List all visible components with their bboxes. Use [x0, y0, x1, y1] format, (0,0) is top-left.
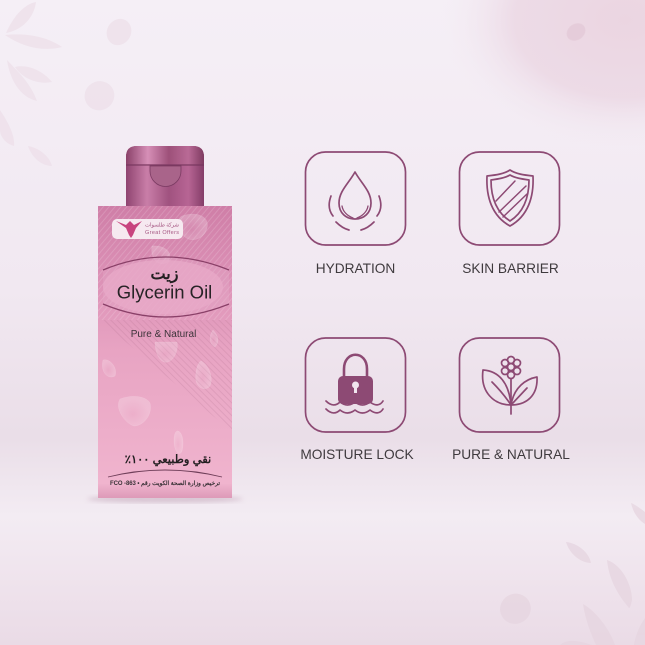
arabic product name: زيت: [151, 266, 179, 284]
icon: flower with leaves: [483, 356, 537, 414]
label: moisture lock: MOISTURE LOCK: [300, 447, 414, 462]
icon: water drop: [329, 172, 381, 230]
decorative petals bottom right: [495, 503, 645, 645]
icon card: skin barrier: [460, 152, 560, 245]
bottle cap: [126, 146, 204, 206]
label oval: [103, 257, 229, 317]
bottle shadow: [87, 495, 243, 503]
decorative petals top left: [0, 2, 589, 166]
icon: shield: [487, 170, 533, 226]
label: pure and natural: PURE & NATURAL: [452, 447, 570, 462]
product name: Glycerin Oil: [117, 282, 212, 302]
icon card: pure and natural: [460, 338, 560, 432]
product bottle: [98, 146, 232, 498]
diagonal stripes: [98, 206, 232, 432]
arabic tagline: نقي وطبيعي ١٠٠٪: [125, 453, 211, 467]
bottom curve: [108, 470, 222, 477]
brand logo label: شركة طلسوات: [145, 222, 179, 228]
icon: padlock over waves: [326, 355, 383, 413]
icon card: moisture lock: [306, 338, 406, 432]
label: skin barrier: SKIN BARRIER: [462, 261, 559, 276]
icon card: hydration: [306, 152, 406, 245]
registration text: FCO -863 • ترخيص وزارة الصحة الكويت رقم: [110, 480, 220, 487]
brand logo label: [112, 219, 183, 239]
tagline: Pure & Natural: [131, 329, 196, 340]
brand logo label: Great Offers: [145, 230, 179, 236]
label: hydration: HYDRATION: [316, 261, 395, 276]
bottle body: [98, 206, 232, 498]
water droplets: [102, 214, 218, 454]
